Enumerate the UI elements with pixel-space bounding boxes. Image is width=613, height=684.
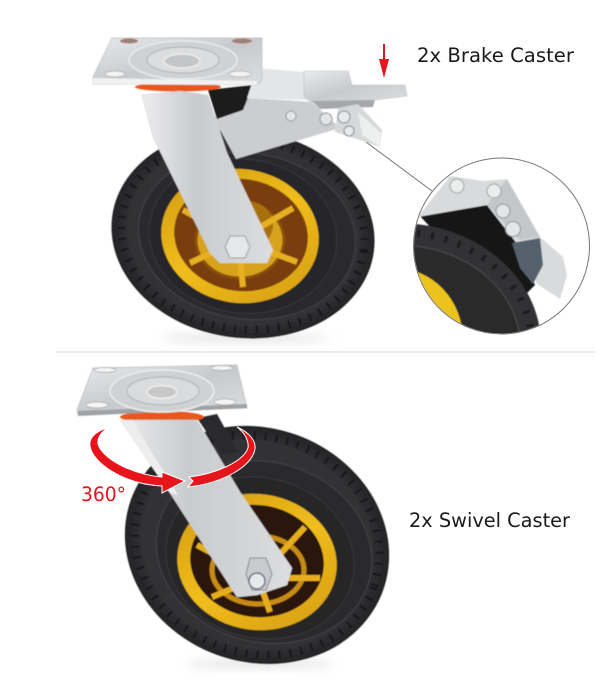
icon: red 360 degree rotation arrow <box>90 427 255 493</box>
swivel caster product image <box>77 365 423 684</box>
brake back plate <box>247 68 304 100</box>
ground shadow <box>185 660 335 668</box>
wheel rim <box>152 159 328 313</box>
inset rivets <box>450 179 464 193</box>
axle nut <box>246 558 272 590</box>
ground shadow <box>160 334 330 342</box>
swivel bearing <box>135 82 221 92</box>
mounting plate <box>93 38 262 85</box>
inset plate <box>418 176 567 299</box>
dark bracket gap <box>208 85 253 119</box>
fork <box>120 420 292 597</box>
heading: 2x Swivel Caster: 2x Swivel Caster <box>409 509 571 532</box>
brake pedal <box>304 71 407 102</box>
mounting plate <box>77 365 247 416</box>
brake caster product image <box>93 38 407 355</box>
swivel bearing <box>120 411 204 423</box>
leader line to inset <box>366 142 432 191</box>
icon: red press arrow <box>379 44 389 78</box>
latch and rivets <box>335 104 382 147</box>
wheel tire <box>91 389 423 684</box>
brake arm <box>213 98 340 159</box>
inset: brake close-up <box>413 158 590 334</box>
heading: 2x Brake Caster: 2x Brake Caster <box>417 44 575 67</box>
rear bracket <box>197 414 238 455</box>
axle bolt <box>225 236 250 258</box>
inset rim <box>418 271 462 324</box>
inset tire <box>414 223 540 332</box>
inset dark gap <box>420 205 535 295</box>
label: 360 degrees: 360° <box>81 483 126 506</box>
wheel tire <box>98 113 388 355</box>
divider <box>56 351 595 353</box>
fork <box>142 91 273 263</box>
wheel rim <box>168 484 346 640</box>
